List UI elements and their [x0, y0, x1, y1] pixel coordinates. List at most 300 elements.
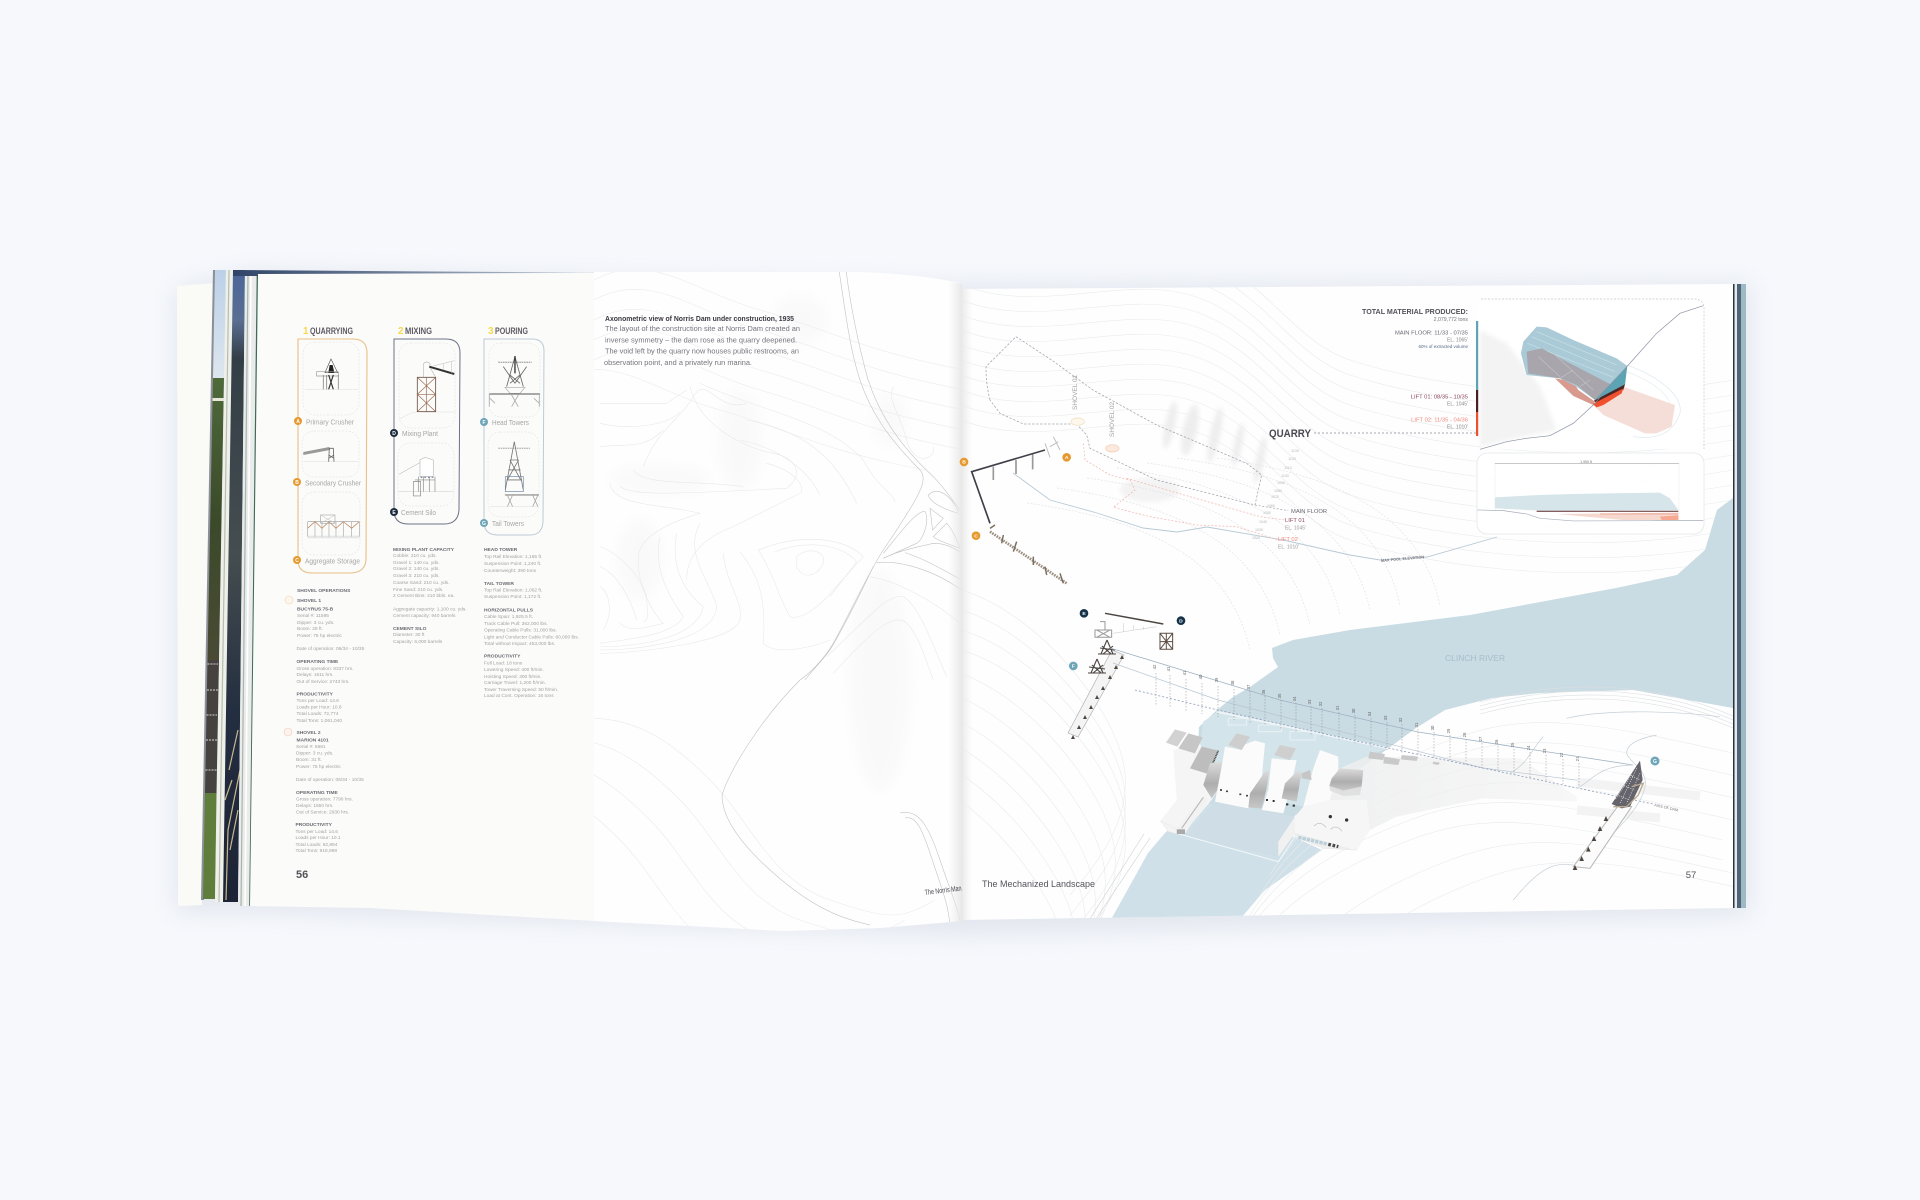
tailwater [1112, 804, 1322, 918]
text block: tower specifications: Tower Traversing Speed: 50 ft/min. [484, 687, 558, 693]
label: cement silo: E [392, 510, 396, 516]
text block: shovel operations: Date of operation: 06/34 - 10/35 [296, 777, 364, 783]
label: tail towers: Tail Towers [492, 521, 524, 528]
text block: shovel operations: OPERATING TIME [296, 659, 339, 665]
marker: G tail towers: G [1653, 759, 1657, 765]
label: primary crusher: A [296, 419, 300, 425]
lift edge [1555, 378, 1595, 405]
text block: shovel operations: Tons per Load: 14.6 [296, 698, 339, 704]
text block: total material produced: EL. 1065' [1447, 338, 1468, 344]
label: quarry with leader: QUARRY [1269, 428, 1312, 440]
icon frame: secondary crusher [302, 431, 359, 477]
text block: tower specifications: Load at Cont. Operation: 16 tons [484, 693, 554, 699]
elevation labels: 1040 [1259, 520, 1267, 524]
head tower rail [1068, 650, 1124, 737]
heading: 1 quarrying: QUARRYING [310, 326, 353, 337]
text block: shovel operations: Boom: 29 ft. [297, 626, 323, 632]
heading: 1 quarrying: 1 [303, 326, 309, 337]
station numbers: 41 [1182, 670, 1187, 675]
cement silo plan [1095, 622, 1112, 637]
station numbers: 39 [1214, 677, 1219, 682]
text block: mixing plant capacity: CEMENT SILO [393, 626, 427, 632]
text block: shovel operations: Serial #: 11595 [297, 613, 329, 619]
text block: mixing plant capacity: Cement capacity: 940 barrels [393, 613, 456, 619]
labels: floor levels: EL. 1010' [1278, 544, 1299, 550]
labels: shovel 01 and 02 [1072, 374, 1116, 437]
intro text: axonometric view: observation point, and a privately run marina. [604, 358, 752, 367]
conveyor line [972, 450, 1045, 523]
station numbers: 30 [1351, 708, 1356, 713]
top cable [1110, 648, 1633, 765]
icon frame: tail towers [488, 432, 539, 517]
shovel 2 marker [1106, 445, 1119, 452]
conveyors and site plant [960, 437, 1185, 670]
elevation labels: 1050 [1263, 511, 1271, 515]
station numbers: 36 [1261, 689, 1266, 694]
station numbers: 28 [1462, 732, 1467, 737]
text block: shovel operations: PRODUCTIVITY [296, 692, 334, 698]
station numbers: 29 [1446, 728, 1451, 733]
strip: white band [212, 398, 224, 401]
blue section [1495, 493, 1678, 511]
deck arches [1314, 823, 1342, 831]
right concrete blocks [1329, 768, 1363, 791]
labels: floor levels: EL. 1045' [1285, 526, 1306, 532]
diversion road beside tailwater [1090, 834, 1150, 918]
panel: quarrying [293, 339, 367, 573]
left page map panel [594, 272, 960, 930]
intro text: axonometric view: The void left by the quarry now houses public restrooms, an [605, 346, 799, 356]
intro text: axonometric view: The layout of the construction site at Norris Dam created an [605, 324, 800, 333]
dam axonometric [1160, 710, 1577, 862]
dimension line [1495, 462, 1679, 464]
text block: total material produced: TOTAL MATERIAL PRODUCED: [1362, 307, 1468, 316]
text block: shovel operations: Gross operation: 7790 hrs. [296, 796, 353, 802]
text block: shovel operations: Power: 75 hp electric [296, 764, 341, 770]
strip: sky photo [213, 270, 226, 378]
grey main floor [1527, 348, 1615, 400]
text block: shovel operations: Out of Service: 2743 hrs. [296, 679, 350, 685]
strip: green trees photo [208, 378, 224, 660]
axis dotted [1135, 690, 1653, 804]
head tower 2 [1088, 659, 1106, 673]
label: axis of dam: AXIS OF DAM [1654, 803, 1679, 812]
icon frame: primary crusher [303, 342, 359, 415]
conveyor legs [993, 453, 1033, 480]
text block: shovel operations: Total Tons: 918,998 [296, 848, 337, 854]
station drop lines [1156, 673, 1579, 787]
text block: mixing plant capacity: Cobble: 210 cu. yds. [393, 553, 437, 559]
access roads [1510, 712, 1720, 900]
strip: page edges [238, 272, 260, 906]
labels: shovel 01 and 02: SHOVEL 02 [1109, 401, 1116, 437]
text block: shovel operations: Total Loads: 62,894 [296, 842, 338, 848]
text block: tower specifications: Total without Impact: 453,000 lbs. [484, 641, 555, 647]
aggregate storage trestle [990, 532, 1067, 583]
text block: tower specifications: Hoisting Speed: 300 ft/min. [484, 674, 542, 680]
label: primary crusher [294, 417, 355, 426]
text block: shovel operations: SHOVEL OPERATIONS [297, 588, 351, 594]
text block: tower specifications: PRODUCTIVITY [484, 654, 521, 660]
quarry shade bands [1120, 400, 1269, 502]
elevation labels [1252, 449, 1299, 540]
text block: tower specifications: Carriage Travel: 1,200 ft/min. [484, 680, 546, 686]
text block: total material produced: EL. 1045' [1447, 402, 1468, 408]
icon: cement silo [398, 457, 453, 496]
station numbers: 30 [1430, 725, 1435, 730]
page number 57: 57 [1686, 870, 1696, 881]
text block: shovel operations [284, 588, 365, 854]
volume bar [1476, 321, 1478, 436]
markers [960, 453, 1185, 670]
label: aggregate storage: C [295, 558, 299, 564]
text block: shovel operations: Boom: 31 ft. [296, 757, 322, 763]
footer: left running title: The Norris Man [924, 884, 962, 897]
text block: mixing plant capacity: Capacity: 6,000 barrels [393, 639, 443, 645]
card: quarry plan [1477, 299, 1704, 449]
markers: A [1065, 455, 1069, 461]
elevation labels: 1110 [1284, 466, 1292, 470]
elevation labels: 1130 [1291, 449, 1299, 453]
river: Clinch River [1195, 498, 1733, 820]
icon frame: head towers [489, 343, 540, 417]
intro text: axonometric view [604, 314, 800, 367]
label: mixing plant: D [392, 431, 396, 437]
lattice tower [1612, 761, 1643, 808]
text block: tower specifications: HORIZONTAL PULLS [484, 608, 534, 614]
primary crusher plan [1045, 437, 1060, 457]
label: tail towers [480, 519, 524, 528]
label: head towers [480, 418, 529, 427]
text block: tower specifications: Top Rail Elevation: 1,062 ft. [484, 588, 542, 594]
label: secondary crusher: Secondary Crusher [305, 480, 362, 488]
contour lines, central hills and road network [600, 380, 962, 680]
label: aggregate storage: Aggregate Storage [305, 558, 360, 566]
road double line [800, 380, 923, 680]
text block: shovel operations: Dipper: 3 cu. yds. [296, 750, 333, 756]
text block: shovel operations: Loads per Hour: 10.8 [296, 704, 342, 710]
text block: mixing plant capacity: Coarse Sand: 210 cu. yds. [393, 580, 450, 586]
text block: total material produced: LIFT 01: 08/35 - 10/35 [1411, 394, 1468, 400]
text block: tower specifications: Suspension Point: 1,172 ft. [484, 594, 541, 600]
text block: mixing plant capacity: Gravel 3: 210 cu. yds. [393, 573, 440, 579]
heading: 1 quarrying [303, 326, 353, 337]
text block: tower specifications: Lowering Speed: 400 ft/min. [484, 667, 544, 673]
label: secondary crusher: B [295, 480, 299, 486]
strip: grey sliver [201, 270, 216, 900]
dashed main floor boundary [986, 337, 1262, 505]
text block: shovel operations: OPERATING TIME [296, 790, 338, 796]
text block: shovel operations: Serial #: 6681 [296, 744, 326, 750]
icon: head towers [489, 356, 540, 407]
dashed line to main floor label [1255, 505, 1288, 511]
station numbers: 22 [1559, 752, 1564, 757]
head tower 1 [1098, 640, 1116, 654]
station numbers: 34 [1367, 711, 1372, 716]
text block: shovel operations: SHOVEL 1 [297, 598, 321, 604]
navy edge along top of left page [233, 270, 640, 276]
quarry outline [986, 337, 1288, 540]
maroon line [1537, 510, 1678, 513]
station numbers: 32 [1398, 717, 1403, 722]
label: tail towers: G [482, 521, 486, 527]
text block: total material produced: 2,079,772 tons [1434, 317, 1468, 323]
markers: D [1179, 618, 1183, 624]
rail outlines over lake [1228, 718, 1315, 740]
labels: floor levels: MAIN FLOOR [1291, 509, 1327, 515]
text block: tower specifications [484, 547, 579, 699]
text block: tower specifications: Full Load: 18 tons [484, 660, 523, 666]
gutter shading [948, 281, 963, 924]
contour lines [901, 240, 1733, 1075]
marker: G tail towers [1650, 756, 1660, 766]
heading: 2 mixing: 2 [398, 326, 404, 337]
icon frame: mixing plant [399, 343, 455, 428]
text block: shovel operations: BUCYRUS 75-B [297, 606, 334, 612]
pink lift volume [1593, 387, 1675, 433]
heading: 3 pouring: POURING [495, 326, 528, 337]
station numbers: 38 [1230, 680, 1235, 685]
contour lines, upper and lower sets [474, 269, 965, 975]
ground line [1477, 510, 1703, 521]
label: aggregate storage [293, 556, 360, 566]
markers: C [974, 533, 978, 539]
tower base [1613, 783, 1643, 807]
station numbers: 31 [1414, 722, 1419, 727]
teal cut face [1595, 366, 1627, 400]
left wall [1177, 797, 1208, 833]
text block: shovel operations: Dipper: 3 cu. yds. [297, 620, 334, 626]
label: Clinch River: CLINCH RIVER [1445, 653, 1505, 663]
text block: shovel operations: Out of Service: 2930 hrs. [296, 810, 349, 816]
markers: F [1072, 664, 1075, 670]
station numbers: 33 [1307, 699, 1312, 704]
elevation labels: 1060 [1267, 504, 1275, 508]
page-edge photo strips [201, 270, 260, 906]
marker: shovel 2 [284, 728, 292, 736]
text block: shovel operations: Delays: 1611 hrs. [296, 672, 333, 678]
text block: tower specifications: Suspension Point: 1,240 ft. [484, 561, 541, 567]
text block: tower specifications: HEAD TOWER [484, 547, 518, 553]
panel: mixing [390, 339, 460, 524]
marker: shovel 1 [285, 596, 293, 604]
label: cement silo: Cement Silo [401, 510, 436, 517]
max pool elevation line [1013, 473, 1497, 560]
intro text: axonometric view: inverse symmetry – the dam rose as the quarry deepened. [605, 336, 797, 344]
rail trucks [1573, 816, 1608, 870]
text block: total material produced: MAIN FLOOR: 11/33 - 07/35 [1395, 330, 1468, 336]
label: head towers: F [482, 420, 486, 426]
pink section [1557, 513, 1678, 520]
station numbers: 34 [1292, 696, 1297, 701]
powerhouse windows [1298, 837, 1327, 844]
text block: mixing plant capacity [393, 547, 467, 645]
contour rings [1627, 365, 1680, 437]
cable lines and axis of dam [1110, 648, 1700, 818]
station numbers: 33 [1383, 715, 1388, 720]
text block: shovel operations: Tons per Load: 14.6 [296, 829, 338, 835]
icon: tail towers [490, 442, 539, 507]
mixing conveyor [1105, 613, 1163, 624]
mixing plant plan [1160, 633, 1173, 649]
shovel 1 marker [1071, 418, 1084, 425]
strip: navy dusk photo [223, 270, 245, 902]
elevation labels: 1030 [1255, 528, 1263, 532]
text block: tower specifications: Counterweight: 390 tons [484, 568, 537, 574]
right page map panel [901, 240, 1793, 1075]
station numbers: 21 [1575, 756, 1580, 761]
text block: tower specifications: Cable Span: 1,925.5 ft. [484, 614, 533, 620]
station numbers: 25 [1510, 742, 1515, 747]
station numbers: 23 [1542, 748, 1547, 753]
card: quarry section [1477, 453, 1704, 534]
grey cross bands [1577, 782, 1700, 818]
text block: tower specifications: TAIL TOWER [484, 581, 514, 587]
lower hairpin road [722, 680, 960, 925]
intro text: axonometric view: Axonometric view of Norris Dam under construction, 1935 [605, 314, 794, 323]
label: mixing plant [390, 429, 438, 438]
head towers and rail [1068, 640, 1124, 739]
text block: mixing plant capacity: MIXING PLANT CAPACITY [393, 547, 455, 553]
labels: floor levels [1278, 509, 1327, 550]
station numbers: 35 [1277, 693, 1282, 698]
text block: total material produced: LIFT 02: 11/35 - 04/36 [1411, 418, 1468, 424]
hill shading [610, 296, 910, 790]
labels: shovel 01 and 02: SHOVEL 01 [1072, 374, 1079, 410]
text block: shovel operations: PRODUCTIVITY [296, 822, 333, 828]
contours below dam [1250, 686, 1733, 916]
red lift 02 [1593, 388, 1623, 407]
text block: tower specifications: Operating Cable Pulls: 31,000 lbs. [484, 628, 557, 634]
elevation labels: 1020 [1252, 536, 1260, 540]
powerhouse deck [1293, 800, 1370, 850]
right page [961, 284, 1733, 920]
rail [1573, 803, 1632, 868]
text block: total material produced: 60% of extracted volume [1418, 344, 1468, 349]
heading: 2 mixing: MIXING [405, 326, 432, 337]
text block: mixing plant capacity: Diameter: 30 ft [393, 632, 425, 638]
hill shade in card [1480, 330, 1557, 447]
label: cement silo [390, 508, 436, 517]
text block: shovel operations: MARION 4101 [296, 738, 329, 744]
page number 56: 56 [296, 869, 308, 881]
elevation labels: 1100 [1281, 474, 1289, 478]
text block: shovel operations: Gross operation: 8337 hrs. [296, 666, 353, 672]
left page [250, 272, 963, 931]
markers: B [962, 460, 966, 466]
text block: mixing plant capacity: 2 Cement Bins: 410 bbls. ea. [393, 593, 455, 599]
text block: shovel operations: SHOVEL 2 [296, 730, 321, 736]
book shadow [175, 272, 1750, 935]
card dashed border [1481, 299, 1704, 449]
panel: pouring [480, 339, 544, 535]
label: secondary crusher [293, 478, 362, 488]
text block: mixing plant capacity: Gravel 1: 140 cu. yds. [393, 560, 440, 566]
text block: mixing plant capacity: Gravel 2: 140 cu. yds. [393, 566, 440, 572]
icon: aggregate storage [308, 515, 359, 538]
maroon lift 01 [1594, 384, 1625, 403]
icon: primary crusher [305, 359, 358, 389]
right side tail tower and rail [1510, 712, 1720, 900]
icon: secondary crusher [303, 447, 358, 462]
label: mixing plant: Mixing Plant [402, 431, 438, 438]
translucent lake cut [1200, 710, 1388, 807]
station numbers: 42 [1152, 664, 1157, 669]
text block: shovel operations: Total Loads: 72,774 [296, 711, 339, 717]
heading: 3 pouring: 3 [488, 326, 494, 337]
station numbers: 37 [1246, 684, 1251, 689]
text block: tower specifications: Track Cable Pull: 362,000 lbs. [484, 621, 548, 627]
label: head towers: Head Towers [492, 420, 529, 427]
rail trucks [1071, 655, 1124, 739]
dam tower 2 [1262, 758, 1297, 813]
text block: total material produced: EL. 1010' [1447, 424, 1468, 430]
terrain profile line [1480, 306, 1703, 449]
second cable [1113, 663, 1622, 786]
text block: shovel operations: Date of operation: 06/34 - 10/35 [296, 646, 365, 652]
text block: shovel operations: Power: 75 hp electric [297, 633, 342, 639]
spillway plate [1293, 757, 1577, 850]
icon frame: aggregate storage [302, 492, 360, 555]
text block: shovel operations: Loads per Hour: 10.1 [296, 835, 341, 841]
text block: total material produced [1362, 307, 1468, 430]
station numbers: 40 [1198, 674, 1203, 679]
dam tower 3 [1303, 750, 1338, 807]
blue excavated volume [1521, 327, 1627, 400]
station numbers: 27 [1478, 736, 1483, 741]
left abutment [1160, 743, 1220, 833]
markers: E [1082, 611, 1086, 617]
dam tower 1 [1215, 741, 1265, 808]
icon: mixing plant [399, 361, 455, 419]
elevation labels: 1120 [1288, 457, 1296, 461]
elevation labels: 1080 [1274, 489, 1282, 493]
back page at far left [177, 283, 215, 906]
text block: tower specifications: Top Rail Elevation: 1,165 ft. [484, 554, 542, 560]
text block: mixing plant capacity: Aggregate capacity: 1,100 cu. yds. [393, 606, 467, 612]
icon frame: cement silo [398, 443, 454, 506]
right page edge strips [1733, 284, 1746, 908]
text block: shovel operations: Delays: 1550 hrs. [296, 803, 333, 809]
label: primary crusher: Primary Crusher [306, 420, 355, 426]
text block: mixing plant capacity: Fine Sand: 210 cu. yds. [393, 587, 443, 593]
elevation labels: 1090 [1277, 481, 1285, 485]
station numbers: 26 [1494, 739, 1499, 744]
strip: dark rock photo [205, 660, 219, 793]
top road continuation [839, 270, 868, 380]
dashed lift boundaries [1083, 443, 1285, 540]
text block: shovel operations: Total Tons: 1,061,040 [296, 718, 342, 724]
basin water [1183, 802, 1295, 857]
labels: floor levels: LIFT 02 [1278, 537, 1298, 543]
cable station numbers [1152, 664, 1580, 787]
strip: white paper edge [215, 270, 233, 902]
text block: tower specifications: Light and Conductor Cable Pulls: 60,000 lbs. [484, 634, 579, 640]
elevation labels: 1070 [1271, 495, 1279, 499]
strip: grass photo [203, 793, 216, 899]
station numbers [1152, 664, 1580, 761]
heading: 3 pouring [488, 326, 528, 337]
station numbers: 32 [1318, 701, 1323, 706]
footer: right running title: The Mechanized Landscape [982, 879, 1095, 889]
station numbers: 31 [1335, 705, 1340, 710]
label: max pool elevation: MAX POOL ELEVATION [1381, 554, 1425, 563]
labels: floor levels: LIFT 01 [1285, 518, 1305, 524]
heading: 2 mixing [398, 326, 432, 337]
station numbers: 41 [1166, 666, 1171, 671]
left concrete blocks [1166, 729, 1187, 747]
station numbers: 24 [1526, 745, 1531, 750]
